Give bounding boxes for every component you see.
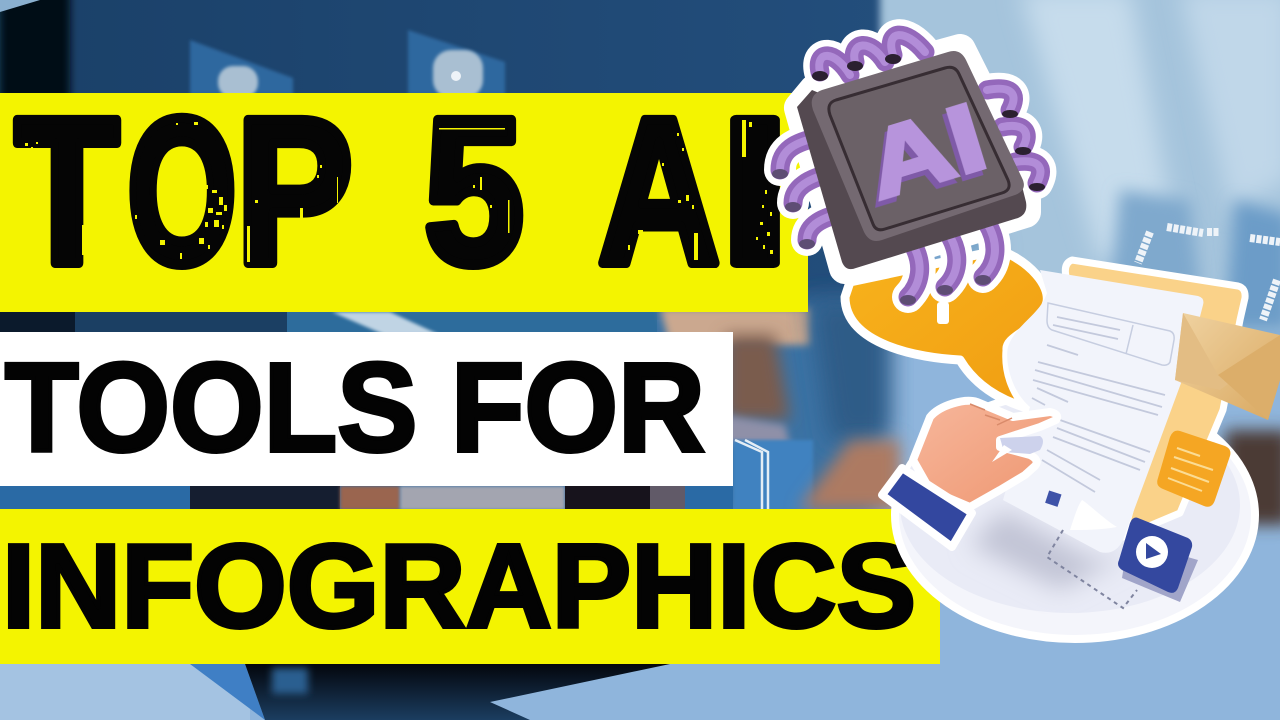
dashed outline bbox=[1047, 530, 1137, 608]
heading: top 5 AI: I bbox=[719, 76, 791, 308]
dotted links bbox=[1138, 227, 1280, 320]
chip base bbox=[797, 90, 1026, 269]
heading: top 5 AI bbox=[15, 76, 791, 308]
heading: infographics: INFOGRAPHICS bbox=[2, 520, 916, 653]
hand and cuff bbox=[882, 401, 1057, 547]
chip pins bbox=[780, 35, 1040, 297]
note card bbox=[1157, 431, 1230, 507]
platform disc bbox=[895, 391, 1255, 639]
white tick on bubble bbox=[937, 302, 949, 324]
paper sheet bbox=[1003, 270, 1203, 553]
heading: top 5 AI: O bbox=[127, 76, 237, 308]
right side background bbox=[1225, 430, 1280, 525]
chip pin sockets bbox=[772, 54, 1045, 305]
heading: top 5 AI: 5 bbox=[424, 76, 524, 308]
chip inner plate bbox=[829, 67, 1009, 230]
chip label: AI bbox=[853, 83, 998, 220]
shirt and folds bbox=[880, 0, 1280, 330]
heading: top 5 AI: T bbox=[15, 76, 119, 308]
banner: white middle bbox=[0, 332, 733, 486]
heading: tools for: TOOLS FOR bbox=[5, 337, 705, 478]
heading: top 5 AI: A bbox=[598, 76, 720, 308]
heading: top 5 AI: P bbox=[236, 76, 353, 308]
play card bbox=[1118, 518, 1198, 602]
strip between the lower banners bbox=[0, 486, 733, 510]
envelope bbox=[1175, 313, 1280, 420]
chip top face bbox=[812, 51, 1024, 241]
yellow folder bbox=[1065, 260, 1245, 537]
illustration: document scene bbox=[845, 250, 1280, 639]
banner: yellow top bbox=[0, 93, 808, 312]
icon: AI chip bbox=[772, 35, 1045, 305]
mid band bbox=[0, 300, 880, 520]
grunge specks on heading bbox=[25, 120, 773, 262]
monitor tiles bbox=[190, 40, 293, 95]
bottom strip bbox=[0, 664, 250, 720]
speech bubble bbox=[845, 250, 1047, 408]
banner: yellow bottom bbox=[0, 509, 940, 664]
chip sticker outline bbox=[780, 35, 1040, 297]
